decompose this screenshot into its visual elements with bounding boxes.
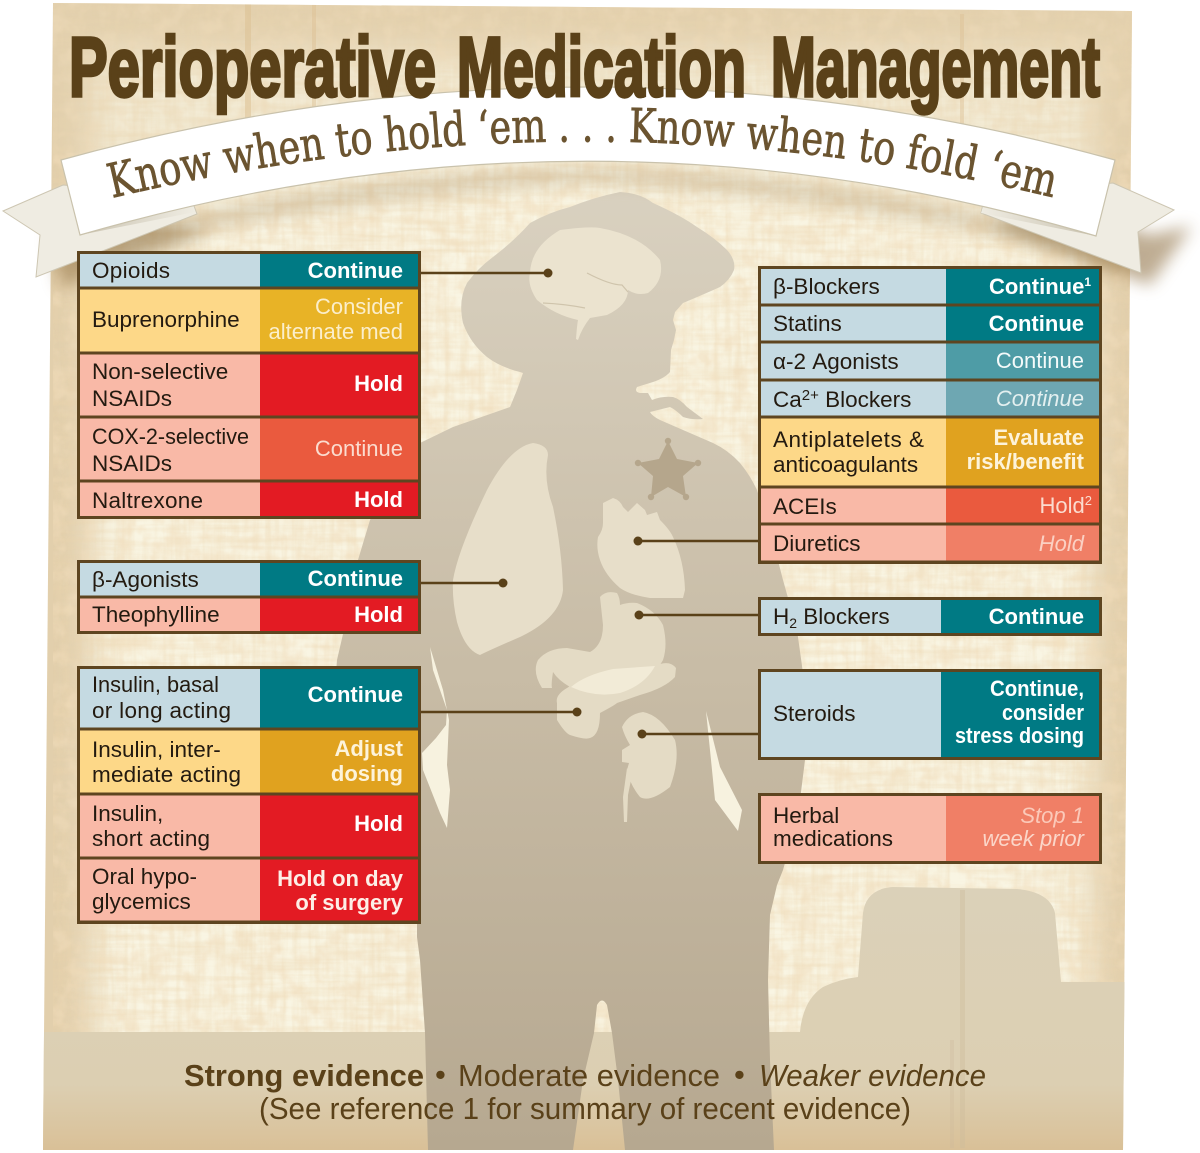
row: opioids: Opioids xyxy=(92,258,170,283)
ribbon tail left xyxy=(3,185,197,277)
panel: steroids table xyxy=(758,669,1102,760)
row: buprenorphine: Consider xyxy=(315,294,403,319)
row: COX-2-selective NSAIDs: NSAIDs xyxy=(92,451,172,476)
row: statins xyxy=(761,306,1099,340)
row: oral hypoglycemics: Hold on day xyxy=(277,866,404,891)
row: insulin short acting: Hold xyxy=(354,811,403,836)
row: ACE inhibitors: 2 xyxy=(1085,493,1092,508)
row: COX-2-selective NSAIDs: COX-2-selective xyxy=(92,424,249,449)
row: calcium blockers: Continue xyxy=(996,386,1084,411)
row: buprenorphine: Buprenorphine xyxy=(92,307,240,332)
row: naltrexone: Naltrexone xyxy=(92,488,203,513)
banner ribbon xyxy=(3,87,1192,288)
row: alpha-2 agonists: Continue xyxy=(996,348,1084,373)
row: oral hypoglycemics: of surgery xyxy=(295,890,404,915)
ground band xyxy=(43,887,1124,1150)
row: antiplatelets and anticoagulants xyxy=(761,418,1099,486)
row: COX-2-selective NSAIDs: Continue xyxy=(315,436,403,461)
row: insulin intermediate: dosing xyxy=(331,761,403,786)
evidence legend: Weaker evidence xyxy=(759,1058,986,1093)
ribbon fold left xyxy=(80,200,195,235)
row: ACE inhibitors xyxy=(761,488,1099,522)
title: Perioperative xyxy=(69,20,436,114)
row: COX-2-selective NSAIDs xyxy=(80,418,418,480)
connector lines and dots xyxy=(420,268,758,738)
evidence legend: Moderate evidence xyxy=(458,1058,720,1093)
panel: H2 blockers table xyxy=(758,597,1102,636)
panel: steroids table: stress dosing xyxy=(955,723,1084,748)
arm gap left xyxy=(422,647,450,828)
evidence legend: • xyxy=(734,1057,745,1092)
row: insulin intermediate xyxy=(80,730,418,792)
icon: stomach xyxy=(536,592,666,695)
row: calcium blockers xyxy=(761,382,1099,416)
row: insulin basal xyxy=(80,669,418,728)
row: oral hypoglycemics: glycemics xyxy=(92,889,191,914)
row: alpha-2 agonists: α-2 Agonists xyxy=(773,349,899,374)
row: beta-agonists: Continue xyxy=(308,566,403,591)
row: buprenorphine: alternate med xyxy=(268,319,403,344)
icon: brain xyxy=(529,227,661,340)
panel: pancreas medications table xyxy=(77,666,421,924)
panel: herbal medications table: Stop 1 xyxy=(1020,803,1084,828)
row: insulin basal: Continue xyxy=(308,682,403,707)
row: calcium blockers: 2+ xyxy=(802,387,819,404)
row: ACE inhibitors: ACEIs xyxy=(773,494,837,519)
ribbon tail right xyxy=(981,183,1174,273)
row: opioids xyxy=(80,254,418,286)
row: naltrexone xyxy=(80,482,418,516)
title: Medication xyxy=(457,20,746,114)
row: calcium blockers: Blockers xyxy=(819,387,911,412)
row: beta-blockers: β-Blockers xyxy=(773,274,880,299)
row: insulin basal: Insulin, basal xyxy=(92,672,219,697)
panel: herbal medications table xyxy=(758,793,1102,864)
row: insulin basal: or long acting xyxy=(92,698,231,723)
row: statins: Continue xyxy=(989,311,1084,336)
row: theophylline: Hold xyxy=(354,602,403,627)
icon: pancreas xyxy=(557,663,676,739)
panel: H2 blockers table: 2 xyxy=(789,615,797,631)
row: naltrexone: Hold xyxy=(354,487,403,512)
panel: H2 blockers table: Continue xyxy=(989,604,1084,629)
panel: herbal medications table: Herbal xyxy=(773,803,839,828)
panel: steroids table: Steroids xyxy=(773,701,856,726)
icon: heart xyxy=(597,498,685,598)
evidence legend: • xyxy=(435,1057,446,1092)
row: theophylline xyxy=(80,598,418,631)
panel: lung medications table xyxy=(77,560,421,634)
row: insulin short acting xyxy=(80,796,418,856)
ribbon fold right xyxy=(981,200,1096,236)
row: antiplatelets and anticoagulants: risk/benefit xyxy=(967,449,1085,474)
panel: H2 blockers table: Blockers xyxy=(797,604,890,629)
ribbon band xyxy=(61,87,1115,236)
row: antiplatelets and anticoagulants: anticoagulants xyxy=(773,452,918,477)
arm gap right xyxy=(706,711,742,831)
panel: herbal medications table: week prior xyxy=(983,826,1086,851)
panel: herbal medications table: medications xyxy=(773,826,893,851)
evidence legend: Strong evidence xyxy=(184,1058,424,1093)
panel: heart medications table xyxy=(758,266,1102,564)
row: antiplatelets and anticoagulants: Antiplatelets & xyxy=(773,427,924,452)
row: beta-agonists: β-Agonists xyxy=(92,567,199,592)
row: oral hypoglycemics xyxy=(80,860,418,920)
sheriff star xyxy=(635,438,701,500)
row: non-selective NSAIDs: NSAIDs xyxy=(92,386,172,411)
row: insulin intermediate: Adjust xyxy=(335,736,404,761)
row: insulin intermediate: mediate acting xyxy=(92,762,241,787)
icon: kidney xyxy=(622,712,677,822)
row: non-selective NSAIDs xyxy=(80,354,418,416)
row: diuretics xyxy=(761,526,1099,560)
row: diuretics: Diuretics xyxy=(773,531,861,556)
row: insulin short acting: Insulin, xyxy=(92,801,163,826)
title xyxy=(69,20,1100,114)
row: beta-blockers xyxy=(761,269,1099,304)
panel: steroids table: consider xyxy=(1002,700,1084,725)
row: non-selective NSAIDs: Non-selective xyxy=(92,359,228,384)
row: statins: Statins xyxy=(773,311,842,336)
row: beta-blockers: Continue xyxy=(989,274,1084,299)
row: calcium blockers: Ca xyxy=(773,387,802,412)
row: antiplatelets and anticoagulants: Evaluate xyxy=(994,425,1084,450)
row: beta-agonists xyxy=(80,563,418,596)
row: insulin intermediate: Insulin, inter- xyxy=(92,737,221,762)
panel: steroids table: Continue, xyxy=(990,676,1084,701)
panel: H2 blockers table: H xyxy=(773,604,789,629)
row: beta-blockers: 1 xyxy=(1084,275,1091,289)
row: alpha-2 agonists xyxy=(761,344,1099,378)
silhouette: cowboy figure xyxy=(334,192,805,1150)
row: non-selective NSAIDs: Hold xyxy=(354,371,403,396)
row: oral hypoglycemics: Oral hypo- xyxy=(92,864,197,889)
icon: lung xyxy=(453,443,563,655)
row: insulin short acting: short acting xyxy=(92,826,210,851)
row: diuretics: Hold xyxy=(1039,531,1085,556)
evidence legend xyxy=(184,1057,986,1126)
panel: brain medications table xyxy=(77,251,421,519)
evidence legend: (See reference 1 for summary of recent evidence) xyxy=(259,1091,911,1126)
row: ACE inhibitors: Hold xyxy=(1040,493,1085,518)
row: theophylline: Theophylline xyxy=(92,602,220,627)
row: buprenorphine xyxy=(80,290,418,352)
row: opioids: Continue xyxy=(308,258,403,283)
banner subtitle: Know when to hold ‘em . . . Know when to fold ‘em xyxy=(106,107,1054,198)
